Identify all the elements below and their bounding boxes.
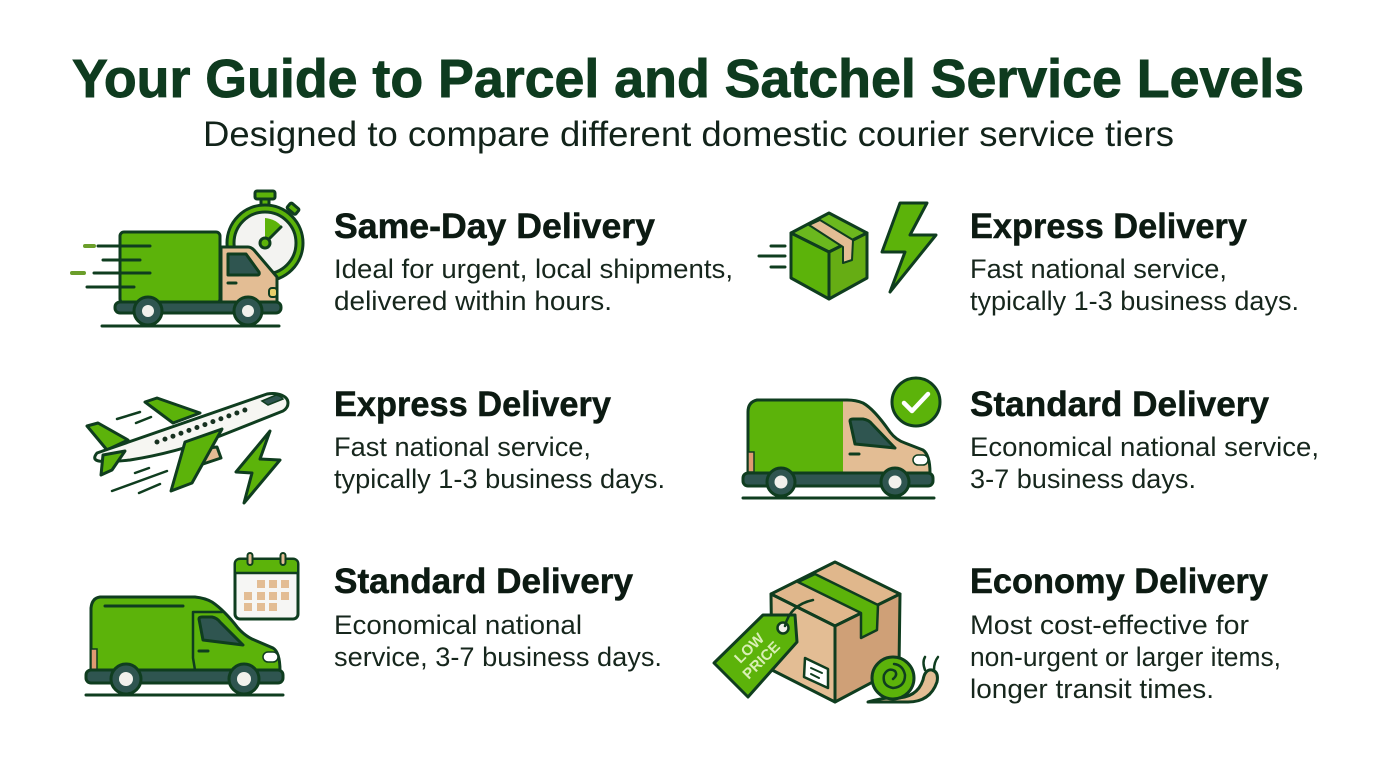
description: longer transit times. xyxy=(970,674,1214,704)
panel: standard delivery (van with calendar) xyxy=(86,553,662,695)
heading: Same-Day Delivery xyxy=(334,207,656,246)
title: Your Guide to Parcel and Satchel Service Levels xyxy=(72,49,1304,109)
description: Fast national service, xyxy=(970,254,1227,284)
heading: Standard Delivery xyxy=(970,385,1270,424)
subtitle: Designed to compare different domestic courier service tiers xyxy=(203,115,1174,154)
heading: Express Delivery xyxy=(970,207,1248,246)
heading: Standard Delivery xyxy=(334,562,634,601)
description xyxy=(970,432,1319,494)
description: service, 3-7 business days. xyxy=(334,642,662,672)
description xyxy=(970,610,1281,704)
panel: express delivery (plane) xyxy=(87,385,665,503)
description: 3-7 business days. xyxy=(970,464,1196,494)
icon: van with calendar xyxy=(86,553,298,695)
icon: parcel with lightning bolt xyxy=(759,203,936,299)
description: non-urgent or larger items, xyxy=(970,642,1281,672)
description: typically 1-3 business days. xyxy=(334,464,665,494)
panel: standard delivery (van with check) xyxy=(743,378,1319,498)
heading: Economy Delivery xyxy=(970,562,1269,601)
description: Economical national service, xyxy=(970,432,1319,462)
description xyxy=(334,610,662,672)
tag label: PRICE xyxy=(739,638,784,683)
icon: airplane with lightning bolt xyxy=(87,393,288,503)
panel: same-day delivery xyxy=(72,191,733,326)
description xyxy=(334,432,665,494)
tag label: LOW xyxy=(731,630,769,667)
panel: economy delivery xyxy=(714,562,1281,704)
description: Fast national service, xyxy=(334,432,591,462)
description: Economical national xyxy=(334,610,582,640)
icon: truck with stopwatch xyxy=(72,191,303,326)
description xyxy=(334,254,733,316)
heading: Express Delivery xyxy=(334,385,612,424)
description: Ideal for urgent, local shipments, xyxy=(334,254,733,284)
description: delivered within hours. xyxy=(334,286,612,316)
description: Most cost-effective for xyxy=(970,610,1249,640)
tag label xyxy=(727,626,784,683)
description xyxy=(970,254,1299,316)
description: typically 1-3 business days. xyxy=(970,286,1299,316)
icon: van with check badge xyxy=(743,378,940,498)
panel: express delivery (parcel) xyxy=(759,203,1299,316)
icon: box with price tag and snail xyxy=(714,562,938,702)
